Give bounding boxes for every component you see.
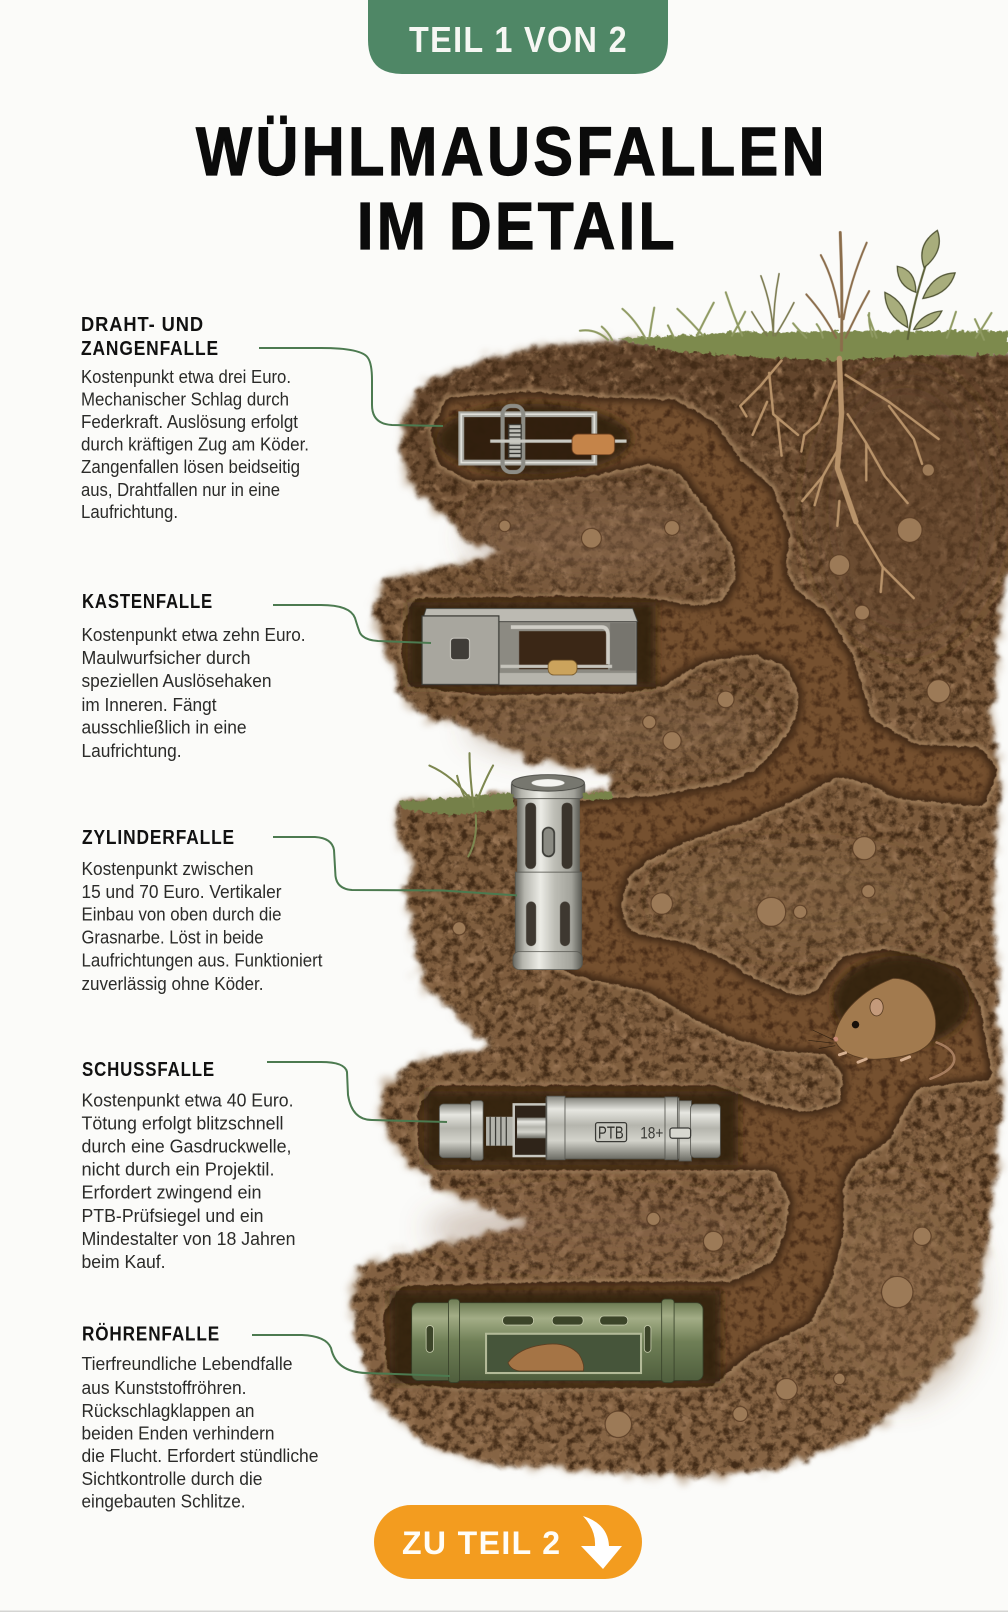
- body text: [82, 624, 306, 761]
- button: to part 2: [374, 1505, 642, 1579]
- callout line: [259, 348, 443, 426]
- illustration: soil cross-section with tunnels and traps: [352, 230, 1008, 1476]
- front panel: [422, 616, 499, 685]
- callout line: [273, 605, 431, 643]
- panel: Schussfalle: [82, 1059, 447, 1272]
- body text: Sichtkontrolle durch die: [82, 1468, 262, 1489]
- body text: zuverlässig ohne Köder.: [82, 973, 264, 994]
- body text: durch kräftigen Zug am Köder.: [81, 434, 309, 455]
- body text: Laufrichtung.: [82, 740, 182, 761]
- body text: beim Kauf.: [82, 1251, 166, 1272]
- panel: Zylinderfalle: [82, 827, 517, 994]
- soil tonal patches: [426, 373, 996, 1402]
- body text: Kostenpunkt zwischen: [82, 858, 254, 879]
- body text: [82, 858, 322, 994]
- body text: aus Kunststoffröhren.: [82, 1377, 246, 1398]
- trap 2: box trap: [422, 608, 638, 685]
- callout line: [273, 837, 517, 895]
- vole: [808, 978, 954, 1079]
- button: to part 2: ZU TEIL 2: [402, 1525, 560, 1561]
- captured vole: [508, 1344, 584, 1371]
- panel: Draht- und Zangenfalle: [81, 314, 443, 522]
- body text: Maulwurfsicher durch: [82, 647, 250, 668]
- badge: part 1 of 2: TEIL 1 VON 2: [409, 19, 628, 60]
- body text: Kostenpunkt etwa drei Euro.: [81, 366, 291, 387]
- body text: PTB-Prüfsiegel und ein: [82, 1205, 264, 1226]
- trap 4: shot trap: PTB: [598, 1122, 624, 1142]
- body text: Laufrichtungen aus. Funktioniert: [82, 950, 322, 971]
- body text: ausschließlich in eine: [82, 716, 246, 738]
- soil body: [352, 342, 1008, 1476]
- PTB stamp: [596, 1123, 627, 1142]
- plant: dry stem: [806, 232, 869, 350]
- plant: leaves: [885, 230, 955, 340]
- body text: 15 und 70 Euro. Vertikaler: [82, 881, 282, 902]
- trap 1: wire and pliers trap: [461, 406, 627, 472]
- callout line: [267, 1062, 447, 1122]
- body text: Mechanischer Schlag durch: [81, 389, 289, 410]
- soil watercolor halo: [352, 342, 1008, 1476]
- body text: durch eine Gasdruckwelle,: [82, 1136, 292, 1157]
- trap 4: shot trap: [439, 1096, 720, 1161]
- body text: [82, 1353, 318, 1512]
- body text: Zangenfallen lösen beidseitig: [81, 456, 300, 477]
- body text: beiden Enden verhindern: [82, 1422, 274, 1443]
- title: IM DETAIL: [357, 189, 678, 264]
- 18+ stamp: 18+: [640, 1123, 663, 1142]
- title: [196, 113, 828, 264]
- body text: speziellen Auslösehaken: [82, 670, 272, 691]
- title: WÜHLMAUSFALLEN: [196, 113, 828, 190]
- heading: ZANGENFALLE: [81, 338, 219, 360]
- heading: ZYLINDERFALLE: [82, 827, 235, 849]
- body text: Federkraft. Auslösung erfolgt: [81, 411, 298, 432]
- body text: eingebauten Schlitze.: [82, 1491, 246, 1512]
- body text: die Flucht. Erfordert stündliche: [82, 1445, 318, 1466]
- callout line: [252, 1335, 450, 1376]
- heading: DRAHT- UND: [81, 314, 204, 336]
- dark trap chambers: [390, 404, 970, 1383]
- bait: [548, 660, 577, 675]
- body text: Grasnarbe. Löst in beide: [82, 927, 264, 948]
- icon: curved arrow: [581, 1516, 622, 1569]
- roots: [740, 358, 939, 598]
- trap 3 grass tuft: [397, 753, 612, 856]
- body text: Tierfreundliche Lebendfalle: [82, 1353, 292, 1374]
- body text: Erfordert zwingend ein: [82, 1182, 262, 1203]
- panel: Röhrenfalle: [82, 1323, 450, 1512]
- body text: Tötung erfolgt blitzschnell: [82, 1112, 284, 1134]
- body text: Kostenpunkt etwa zehn Euro.: [82, 624, 306, 645]
- body text: Kostenpunkt etwa 40 Euro.: [82, 1089, 294, 1110]
- trap 5: tube trap: [412, 1299, 703, 1383]
- body text: Einbau von oben durch die: [82, 904, 282, 924]
- grass blades: [580, 274, 991, 340]
- body text: Mindestalter von 18 Jahren: [82, 1228, 296, 1249]
- body text: aus, Drahtfallen nur in eine: [81, 479, 280, 500]
- trap 3: cylinder trap: [511, 775, 585, 970]
- panel: Kastenfalle: [82, 591, 431, 761]
- surface grass band: [616, 331, 1008, 361]
- body text: Laufrichtung.: [81, 501, 178, 522]
- body text: nicht durch ein Projektil.: [82, 1159, 274, 1180]
- body text: Rückschlagklappen an: [82, 1400, 254, 1421]
- badge: part 1 of 2: [368, 0, 668, 74]
- heading: [81, 314, 219, 360]
- tunnel system: [383, 392, 999, 1389]
- heading: RÖHRENFALLE: [82, 1323, 220, 1346]
- body text: im Inneren. Fängt: [82, 694, 216, 715]
- body text: [82, 1089, 296, 1272]
- heading: SCHUSSFALLE: [82, 1059, 215, 1081]
- heading: KASTENFALLE: [82, 591, 213, 613]
- body text: [81, 366, 309, 522]
- bait: [572, 434, 615, 455]
- pebbles: [453, 464, 950, 1437]
